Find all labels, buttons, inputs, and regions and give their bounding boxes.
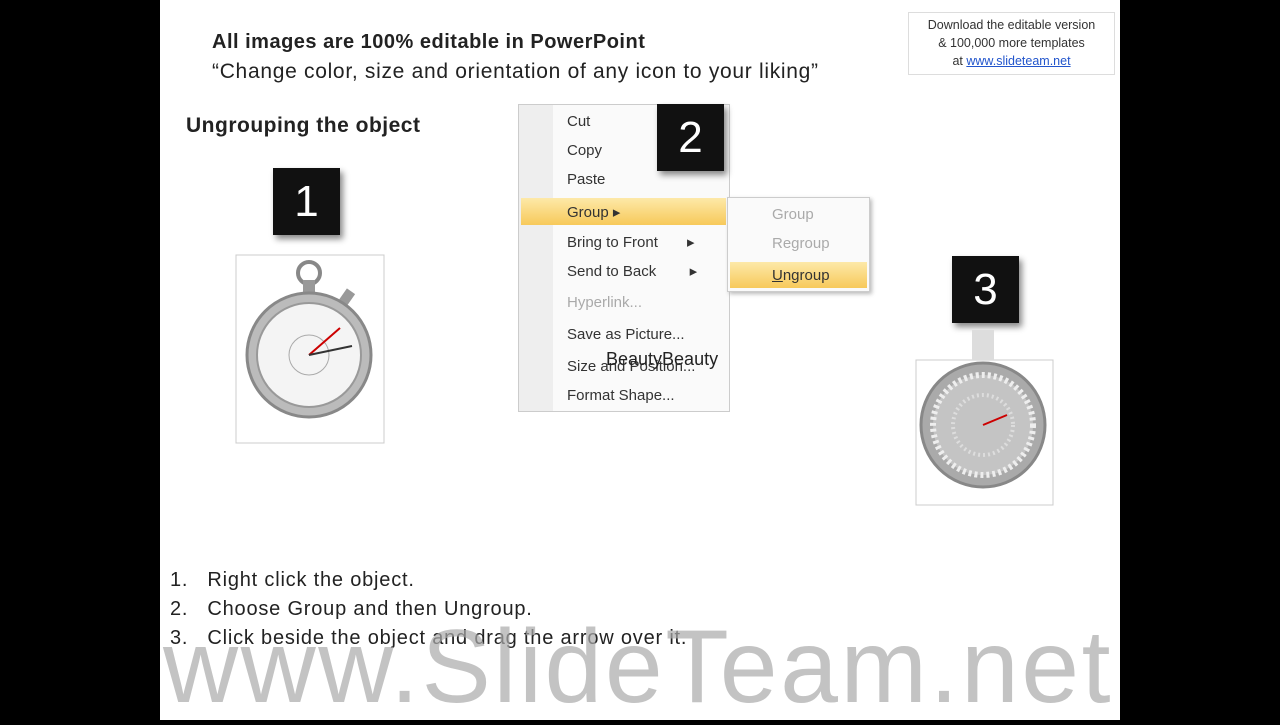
stopwatch 1: [236, 254, 384, 444]
step 1 number box: 1: [294, 177, 319, 226]
overlay text: BeautyBeauty: [606, 349, 718, 369]
submenu: [727, 197, 870, 292]
step 2 context menu: Bring to Front ▸: [567, 234, 695, 251]
subheading: Ungrouping the object: [186, 114, 420, 137]
instructions list: 1. Right click the object.: [170, 569, 415, 591]
header text: [212, 31, 819, 83]
download note: at www.slideteam.net: [952, 54, 1071, 68]
step 2 context menu: Group ▸: [567, 204, 620, 221]
instructions list: 2. Choose Group and then Ungroup.: [170, 598, 533, 620]
instructions list: [170, 569, 687, 649]
header text: All images are 100% editable in PowerPoint: [212, 31, 645, 53]
step 2 context menu: Copy: [567, 142, 602, 159]
submenu: Regroup: [772, 235, 830, 252]
instructions list: 3. Click beside the object and drag the arrow over it.: [170, 627, 687, 649]
step 2 context menu: Cut: [567, 113, 590, 130]
stopwatch 3: [916, 330, 1054, 506]
submenu: Ungroup: [772, 267, 830, 284]
download note: & 100,000 more templates: [938, 36, 1085, 50]
step 2 context menu: Size and Position...: [567, 358, 695, 375]
header text: “Change color, size and orientation of any icon to your liking”: [212, 60, 819, 83]
submenu: Group: [772, 206, 814, 223]
step 3 number box: [952, 256, 1019, 323]
step 2 context menu: Paste: [567, 171, 605, 188]
step 2 context menu: Hyperlink...: [567, 294, 642, 311]
step 1 number box: [273, 168, 340, 235]
step 2 context menu: Save as Picture...: [567, 326, 685, 343]
step 2 number box: [657, 104, 724, 171]
step 2 context menu: Format Shape...: [567, 387, 675, 404]
download note: Download the editable version: [928, 18, 1095, 32]
step 2 context menu: [518, 104, 730, 412]
step 2 context menu: Send to Back ▸: [567, 263, 697, 280]
step 3 number box: 3: [973, 265, 998, 314]
download note: [908, 12, 1115, 75]
step 2 number box: 2: [678, 113, 703, 162]
slide panel: [160, 0, 1120, 720]
watermark: www.SlideTeam.net: [163, 609, 1113, 725]
